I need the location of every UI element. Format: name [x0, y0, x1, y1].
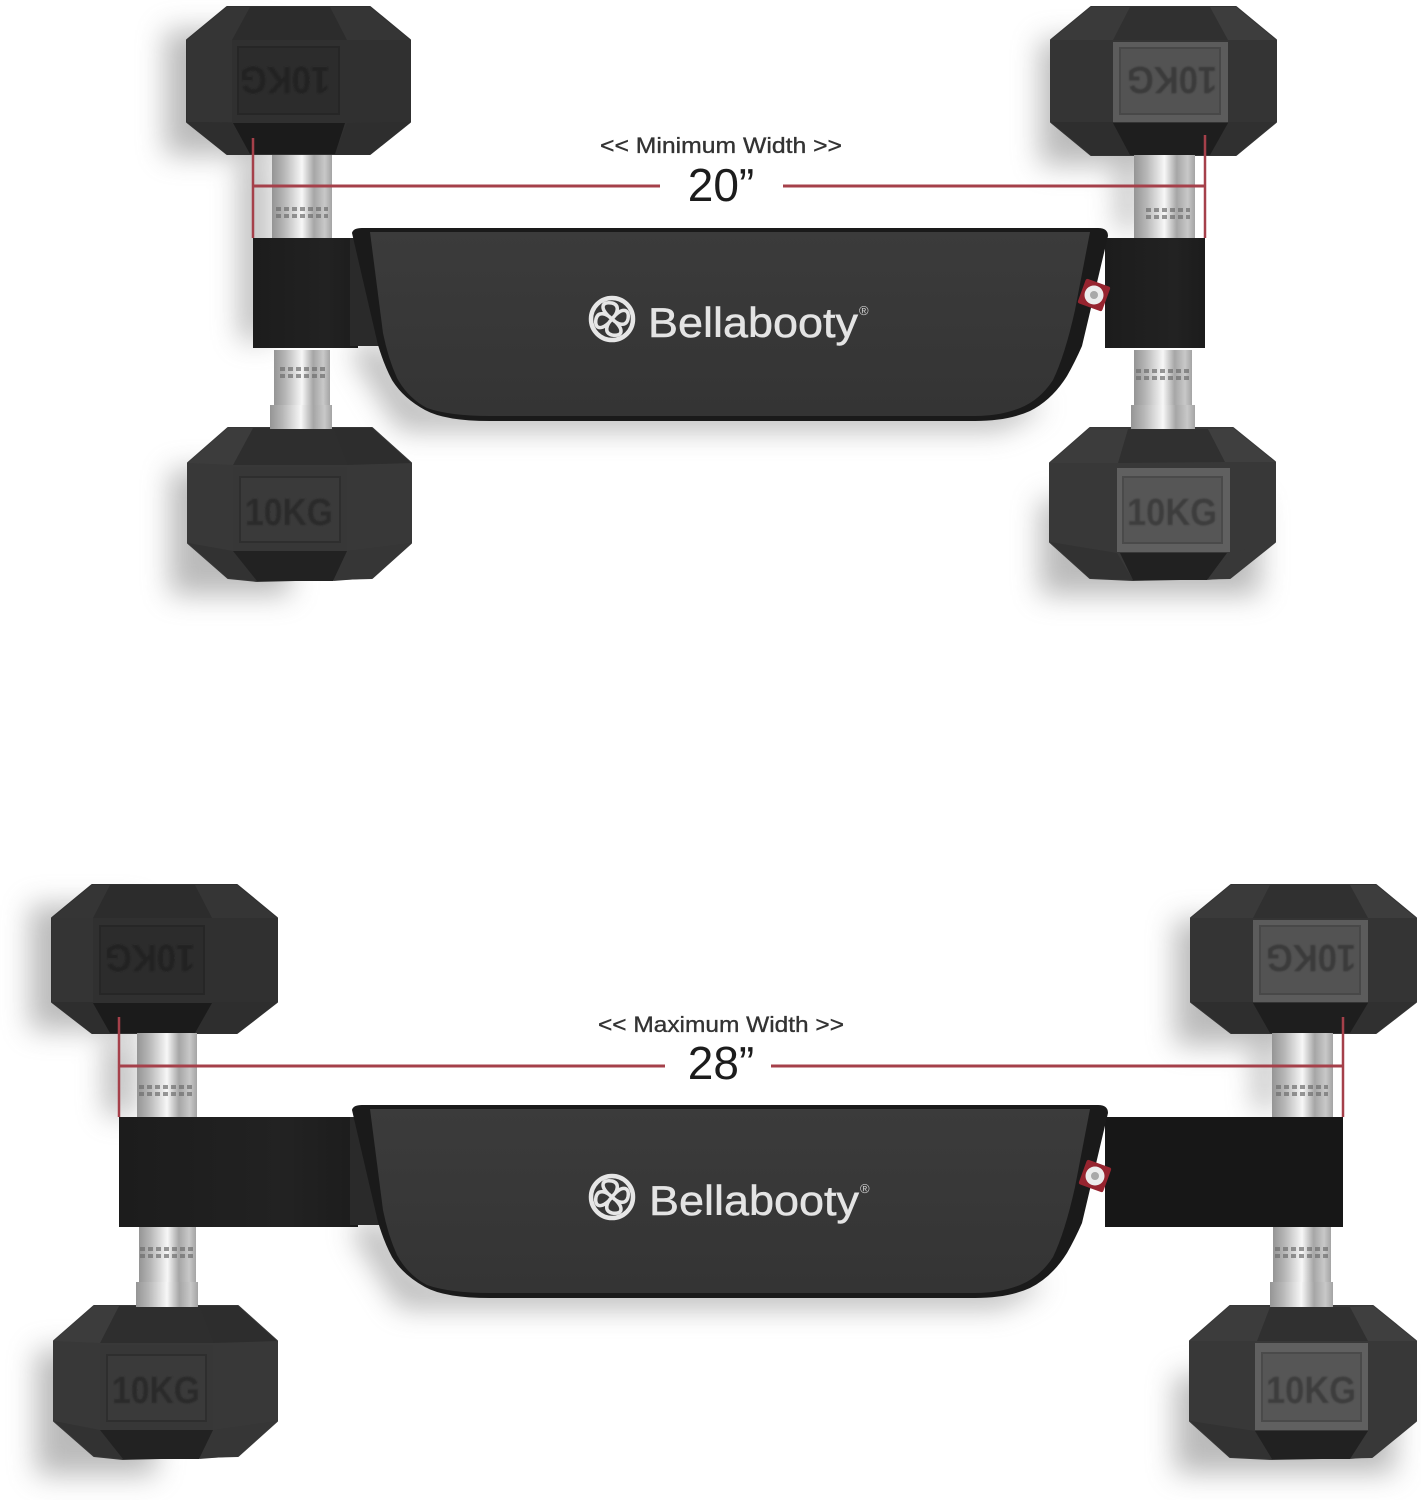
red measuring lines	[253, 135, 1205, 238]
28 inch value: 28”	[688, 1037, 754, 1089]
logo icon	[591, 1176, 633, 1218]
bottom left dumbbell head: 10KG	[245, 492, 333, 534]
logo icon	[591, 298, 633, 340]
bottom left dumbbell head	[188, 428, 411, 581]
top right dumbbell head	[1051, 7, 1276, 155]
top left dumbbell head	[52, 885, 277, 1033]
top right dumbbell head: 10KG	[1127, 58, 1217, 100]
brand logo: Bellabooty	[648, 299, 858, 346]
head shadows	[165, 30, 1260, 595]
panel: minimum width dumbbell setup	[165, 7, 1276, 595]
top right dumbbell head	[1191, 885, 1416, 1033]
panel: maximum width dumbbell setup	[30, 885, 1416, 1475]
maximum width label: << Maximum Width >>	[598, 1012, 844, 1037]
head shadows	[30, 905, 1395, 1475]
brand logo: ®	[860, 1181, 870, 1196]
brand logo	[591, 1176, 870, 1224]
bottom left dumbbell head	[54, 1306, 277, 1459]
bottom right dumbbell head	[1190, 1306, 1416, 1459]
top left dumbbell head: 10KG	[105, 936, 195, 978]
minimum width label: << Minimum Width >>	[600, 133, 842, 158]
top left dumbbell head	[187, 7, 410, 154]
dumbbell handles	[270, 155, 1195, 429]
adjustable straps	[253, 238, 1205, 348]
top right dumbbell head: 10KG	[1266, 936, 1356, 978]
20 inch value: 20”	[688, 159, 754, 211]
adjustable straps	[119, 1117, 1343, 1227]
red tag	[1077, 278, 1111, 312]
pouch	[352, 1105, 1108, 1298]
red measuring lines	[119, 1017, 1343, 1117]
top left dumbbell head: 10KG	[240, 58, 330, 100]
bottom right dumbbell head: 10KG	[1127, 492, 1217, 534]
pouch	[352, 228, 1108, 421]
red tag	[1078, 1159, 1112, 1193]
brand logo: Bellabooty	[649, 1177, 859, 1224]
bottom right dumbbell head	[1050, 428, 1275, 580]
bottom left dumbbell head: 10KG	[112, 1370, 200, 1412]
brand logo	[591, 298, 869, 346]
dumbbell handles	[136, 1033, 1333, 1307]
brand logo: ®	[859, 303, 869, 318]
bottom right dumbbell head: 10KG	[1266, 1370, 1356, 1412]
